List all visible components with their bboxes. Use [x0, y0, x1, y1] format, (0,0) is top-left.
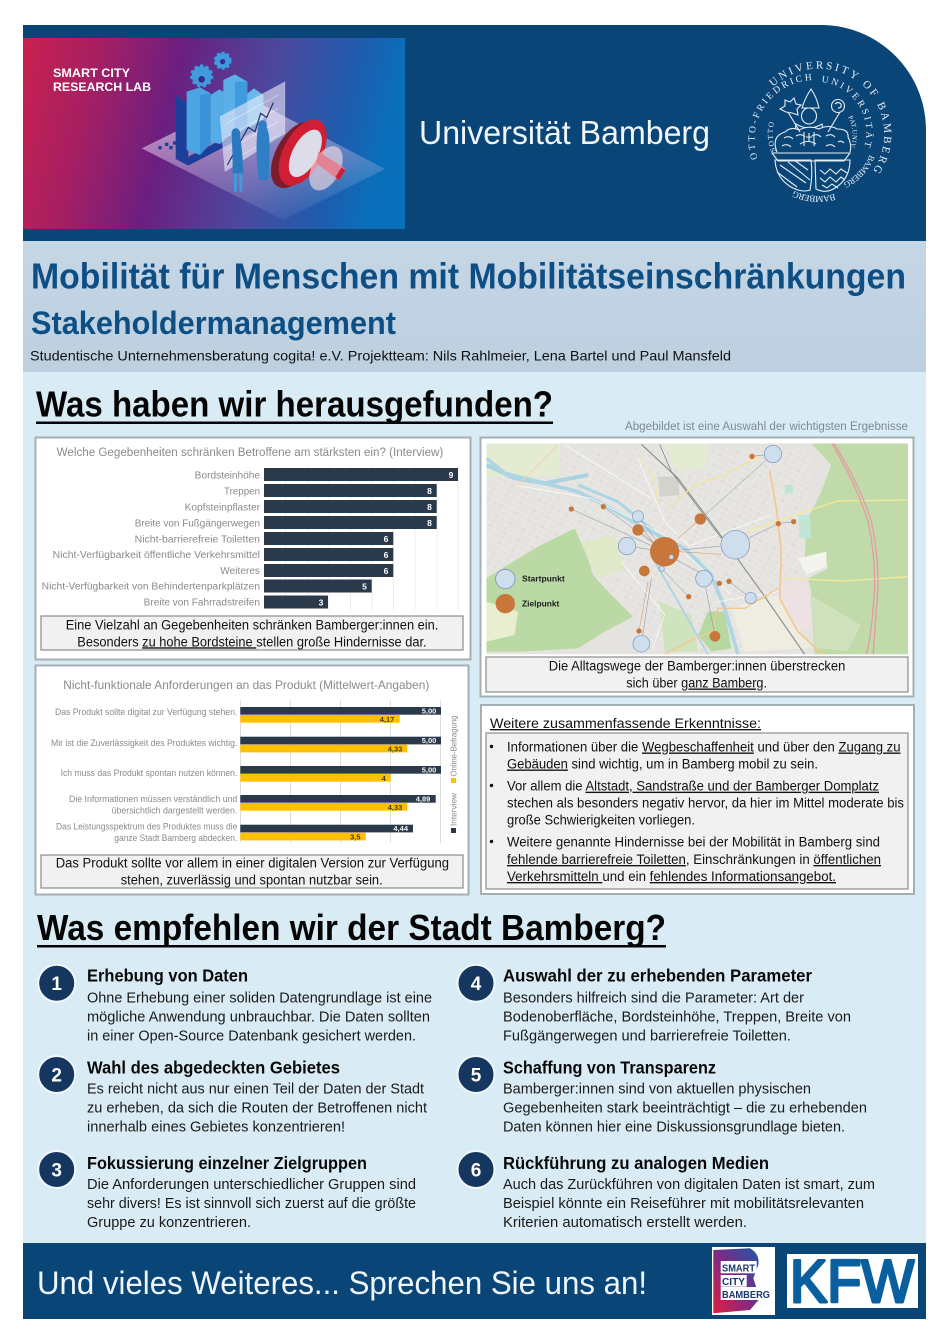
findings list: stechen als besonders negativ hervor, da hier im Mittel moderate bis — [507, 796, 904, 811]
findings list: fehlende barrierefreie Toiletten, Einschränkungen in öffentlichen — [507, 852, 881, 867]
project team line: Studentische Unternehmensberatung cogita! e.V. Projektteam: Nils Rahlmeier, Lena Bartel und Paul Mansfeld — [30, 348, 731, 364]
grouped bar chart: 4,44 — [393, 824, 409, 833]
callout: obstacles — [41, 616, 463, 650]
recommendation 2: Es reicht nicht aus nur einen Teil der Daten der Stadt — [87, 1082, 424, 1098]
recommendation 4: Bodenoberfläche, Bordsteinhöhe, Treppen, Breite von — [503, 1010, 851, 1026]
chart title: Nicht-funktionale Anforderungen an das Produkt (Mittelwert-Angaben) — [63, 678, 429, 692]
grouped bar chart: 4,89 — [416, 794, 430, 804]
grouped bar chart: 5,00 — [422, 736, 436, 745]
recommendation 6 — [458, 1151, 875, 1231]
heading: recommendations: Was empfehlen wir der Stadt Bamberg? — [37, 907, 666, 948]
recommendation 1: 1 — [51, 974, 62, 995]
university seal: BAMBERG — [844, 154, 875, 188]
main title: Mobilität für Menschen mit Mobilitätseinschränkungen — [31, 256, 906, 296]
bar chart rows: Bordsteinhöhe — [195, 470, 260, 482]
note: selection of results: Abgebildet ist eine Auswahl der wichtigsten Ergebnisse — [625, 421, 908, 433]
findings list — [486, 733, 908, 889]
panel: further findings — [481, 705, 914, 894]
grouped bar chart: 4,17 — [380, 715, 394, 724]
bar chart rows: Breite von Fahrradstreifen — [144, 598, 260, 608]
map legend: Zielpunkt — [522, 598, 559, 608]
university seal: PAT.UNIV. — [848, 115, 857, 148]
recommendation 3: Gruppe zu konzentrieren. — [87, 1215, 251, 1231]
bar chart rows: 6 — [384, 550, 389, 560]
wordmark: Universität Bamberg: Universität Bamberg — [419, 114, 710, 151]
recommendation 2: zu erheben, da sich die Routen der Betroffenen nicht — [87, 1100, 427, 1116]
university seal: UNIVERSITÄT — [822, 76, 874, 148]
background panel — [23, 372, 926, 1244]
bar chart rows: 8 — [427, 518, 432, 528]
recommendation 4 — [458, 965, 851, 1044]
recommendation 4: Besonders hilfreich sind die Parameter: Art der — [503, 990, 804, 1006]
logo: KFW: KFW — [790, 1248, 914, 1315]
findings list: Weitere genannte Hindernisse bei der Mobilität in Bamberg sind — [507, 835, 880, 850]
grouped bar chart: 5,00 — [422, 766, 436, 774]
bar chart rows: Weiteres — [220, 566, 260, 577]
recommendation 6: 6 — [471, 1160, 481, 1182]
logo: smart city bamberg: CITY — [722, 1276, 745, 1288]
grouped bar chart: Ich muss das Produkt spontan nutzen können. — [61, 768, 237, 778]
callout: obstacles: Eine Vielzahl an Gegebenheiten schränken Bamberger:innen ein. — [66, 617, 438, 632]
recommendation 3 — [38, 1151, 416, 1231]
bar chart rows — [42, 468, 458, 608]
recommendation 5: 5 — [471, 1066, 482, 1086]
hero image: smart city research lab: RESEARCH LAB — [53, 82, 151, 94]
title band — [23, 241, 926, 372]
footer band — [23, 1243, 926, 1319]
callout: map — [486, 657, 908, 692]
route start and end points — [569, 445, 796, 652]
recommendation 5: Bamberger:innen sind von aktuellen physischen — [503, 1082, 811, 1098]
bar chart rows: Breite von Fußgängerwegen — [135, 518, 260, 530]
grouped bar chart: 4,33 — [388, 803, 402, 812]
grouped bar chart: Das Produkt sollte digital zur Verfügung stehen. — [55, 707, 237, 717]
callout: obstacles: Besonders zu hohe Bordsteine stellen große Hindernisse dar. — [77, 634, 427, 649]
recommendation 1: Erhebung von Daten — [87, 966, 248, 986]
chart title: Welche Gegebenheiten schränken Betroffene am stärksten ein? (Interview) — [57, 447, 443, 459]
chart legend — [448, 715, 458, 833]
recommendation 5: Daten können hier eine Diskussionsgrundlage bieten. — [503, 1120, 845, 1136]
findings list: Informationen über die Wegbeschaffenheit und über den Zugang zu — [507, 740, 900, 754]
recommendation 1: mögliche Anwendung unbrauchbar. Die Daten sollten — [87, 1010, 430, 1026]
recommendation 6: Auch das Zurückführen von digitalen Daten ist smart, zum — [503, 1177, 875, 1193]
recommendation 1: Ohne Erhebung einer soliden Datengrundlage ist eine — [87, 990, 432, 1006]
recommendation 4: 4 — [471, 974, 482, 995]
grouped bar chart: 5,00 — [422, 706, 436, 716]
findings list: große Schwierigkeiten vorliegen. — [507, 812, 695, 828]
map legend — [496, 569, 565, 613]
recommendation 5 — [458, 1056, 867, 1136]
grouped bar chart: ganze Stadt Bamberg abdecken. — [114, 833, 237, 843]
subtitle: Stakeholdermanagement — [31, 305, 396, 341]
grouped bar chart: übersichtlich dargestellt werden. — [112, 805, 237, 815]
bar chart rows: 8 — [427, 486, 432, 496]
logo: smart city bamberg: SMART — [722, 1262, 756, 1274]
bar chart rows: 3 — [319, 598, 324, 608]
grouped bar chart: Das Leistungsspektrum des Produktes muss die — [56, 821, 237, 831]
panel: map of routes — [480, 438, 914, 696]
logo: smart city bamberg — [712, 1247, 775, 1315]
bar chart rows: 9 — [449, 470, 454, 480]
recommendation 3: Die Anforderungen unterschiedlicher Gruppen sind — [87, 1177, 416, 1193]
callout: map: sich über ganz Bamberg. — [626, 676, 767, 690]
bar chart rows: 8 — [427, 502, 432, 512]
recommendation 3: 3 — [51, 1160, 62, 1182]
recommendation 5: Schaffung von Transparenz — [503, 1058, 716, 1078]
hero image: smart city research lab: SMART CITY — [53, 68, 130, 80]
bar chart rows: Treppen — [224, 486, 260, 498]
recommendation 5: Gegebenheiten stark beeinträchtigt – die zu erhebenden — [503, 1100, 867, 1116]
grouped bar chart: Mir ist die Zuverlässigkeit des Produktes wichtig. — [51, 738, 237, 748]
bar chart rows: 5 — [362, 582, 367, 592]
recommendation 4: Auswahl der zu erhebenden Parameter — [503, 966, 812, 986]
findings list: Verkehrsmitteln und ein fehlendes Informationsangebot. — [507, 869, 836, 884]
chart legend: Online-Befragung — [448, 715, 458, 776]
bar chart rows: Nicht-Verfügbarkeit öffentliche Verkehrsmittel — [53, 550, 260, 561]
header band — [23, 25, 926, 241]
grouped bar chart: 3,5 — [350, 832, 361, 842]
recommendation 3: sehr divers! Es ist sinnvoll sich zuerst auf die größte — [87, 1196, 416, 1212]
callout: requirements — [41, 855, 463, 888]
callout: requirements: stehen, zuverlässig und spontan nutzbar sein. — [121, 873, 383, 888]
map — [486, 443, 908, 654]
recommendation 2 — [38, 1056, 427, 1136]
recommendation 1: in einer Open-Source Datenbank gesichert werden. — [87, 1028, 416, 1044]
university seal: UNIVERSITY OF BAMBERG — [768, 61, 892, 174]
bar chart rows: Nicht-Verfügbarkeit von Behindertenparkplätzen — [42, 582, 260, 592]
bar chart rows: Nicht-barrierefreie Toiletten — [135, 534, 260, 546]
call to action: Und vieles Weiteres... Sprechen Sie uns an! — [37, 1265, 647, 1301]
chart legend: Interview — [448, 792, 458, 826]
panel: non-functional requirements chart — [36, 666, 468, 894]
recommendation 2: 2 — [51, 1066, 62, 1086]
panel heading: Weitere zusammenfassende Erkenntnisse: — [490, 716, 761, 731]
recommendation 2: Wahl des abgedeckten Gebietes — [87, 1058, 340, 1078]
university seal: BAMBERG — [792, 191, 836, 202]
hero image: smart city research lab — [23, 38, 405, 229]
recommendation 6: Beispiel könnte ein Reiseführer mit mobilitätsrelevanten — [503, 1196, 864, 1212]
recommendation 1 — [38, 965, 432, 1044]
panel: obstacles bar chart — [36, 438, 470, 660]
grouped bar chart: 4 — [382, 774, 387, 783]
callout: map: Die Alltagswege der Bamberger:innen überstrecken — [549, 658, 845, 673]
grouped bar chart — [51, 706, 441, 843]
heading: findings: Was haben wir herausgefunden? — [36, 384, 553, 424]
recommendation 4: Fußgängerwegen und barrierefreie Toiletten. — [503, 1028, 791, 1044]
bar chart rows: 6 — [384, 534, 389, 544]
bar chart rows: 6 — [384, 566, 389, 576]
university seal: SOTTO — [768, 122, 776, 152]
recommendation 2: innerhalb eines Gebietes konzentrieren! — [87, 1120, 345, 1136]
grouped bar chart: Die Informationen müssen verständlich und — [69, 794, 237, 804]
grouped bar chart: 4,33 — [388, 744, 402, 754]
recommendation 3: Fokussierung einzelner Zielgruppen — [87, 1153, 367, 1173]
findings list: Vor allem die Altstadt, Sandstraße und der Bamberger Domplatz — [507, 779, 879, 794]
university seal — [748, 61, 892, 202]
findings list: Gebäuden sind wichtig, um in Bamberg mobil zu sein. — [507, 756, 818, 772]
map legend: Startpunkt — [522, 574, 565, 584]
bar chart rows: Kopfsteinpflaster — [185, 502, 261, 514]
logo: smart city bamberg: BAMBERG — [722, 1289, 770, 1301]
callout: requirements: Das Produkt sollte vor allem in einer digitalen Version zur Verfügung — [56, 856, 449, 870]
recommendation 6: Kriterien automatisch erstellt werden. — [503, 1215, 747, 1231]
recommendation 6: Rückführung zu analogen Medien — [503, 1153, 769, 1173]
